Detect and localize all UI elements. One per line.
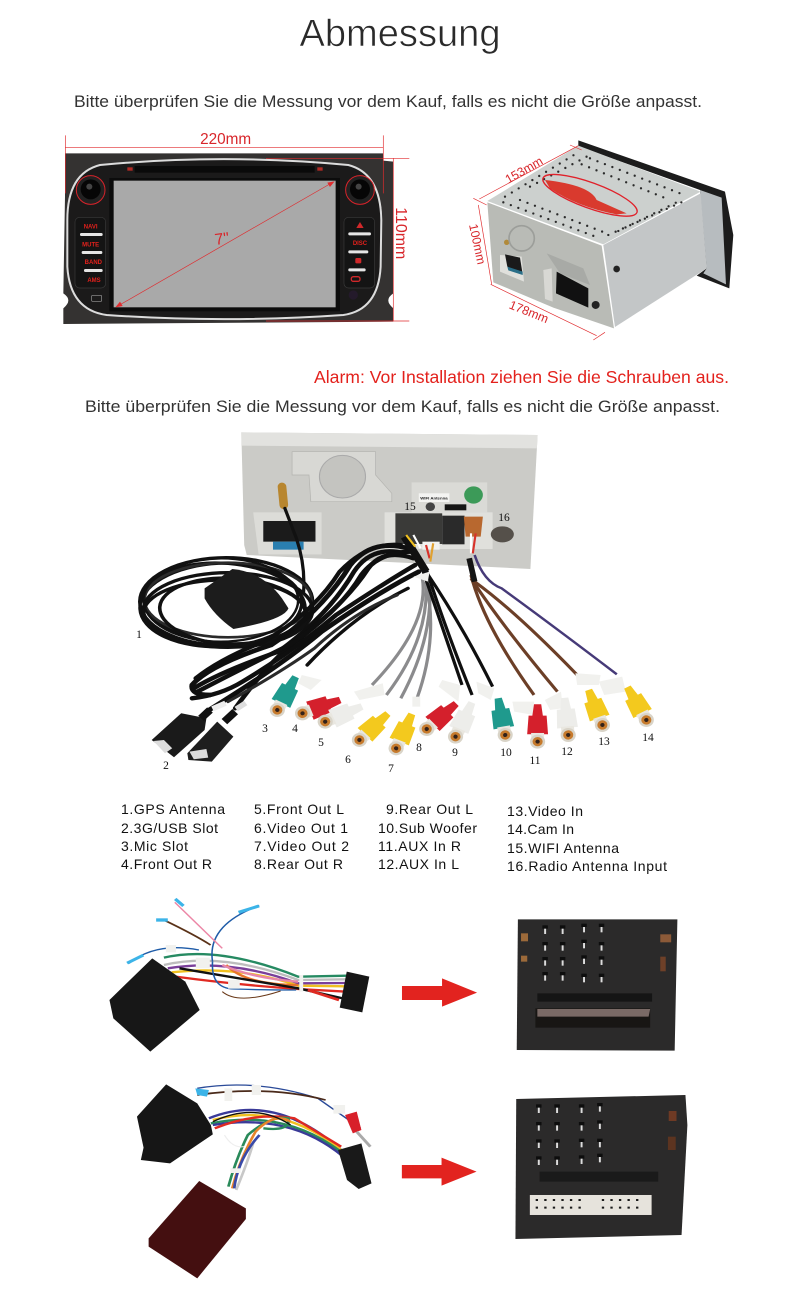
left button panel: BAND [85, 260, 103, 266]
rear face [487, 202, 614, 328]
connector legend list: 12.AUX In L [378, 856, 459, 872]
left button panel: NAVI [84, 224, 98, 230]
panel: rear connections with cables [138, 432, 659, 762]
cable: grey audio group [372, 578, 431, 698]
callout numbers on connectors: 13 [598, 736, 610, 748]
plug: large connector [137, 1084, 213, 1163]
cable: black audio group [419, 558, 493, 695]
connector legend list: 14.Cam In [507, 821, 574, 837]
callout numbers on connectors [136, 501, 654, 775]
dimension: 178mm: 178mm [507, 298, 551, 326]
icon: USB sockets [152, 701, 247, 762]
connectors: RCA plugs [265, 672, 659, 759]
dimension: 153mm [473, 145, 582, 205]
wire labels [224, 1085, 345, 1173]
callout numbers on connectors: 5 [318, 737, 324, 749]
callout numbers on connectors: 11 [529, 755, 541, 767]
plug: small connector [338, 1143, 372, 1189]
text: measurement note repeat: Bitte überprüfen Sie die Messung vor dem Kauf, falls es nicht die Größe anpasst. [85, 398, 720, 416]
dimension: 178mm [491, 284, 605, 340]
connector legend list: 11.AUX In R [378, 838, 461, 854]
icon: right knob [346, 176, 374, 204]
dimension: 7 inch diagonal [115, 181, 335, 307]
dimension: 153mm: 153mm [503, 154, 545, 187]
left button panel: MUTE [82, 243, 99, 249]
cable: GPS antenna with coil [138, 487, 313, 651]
callout numbers on connectors: 10 [500, 747, 512, 759]
dimension: 100mm: 100mm [466, 223, 488, 266]
screen [114, 181, 336, 307]
connector legend list: 16.Radio Antenna Input [507, 858, 667, 874]
left button panel: AMS [87, 278, 101, 284]
panel: wiring harness 2 with CAN box [137, 1084, 687, 1278]
panel: front view of head unit with dimensions [63, 131, 409, 324]
connector legend list: 15.WIFI Antenna [507, 840, 619, 856]
connector legend list: 3.Mic Slot [121, 838, 188, 854]
unit back plate [241, 432, 538, 569]
connector legend list: 2.3G/USB Slot [121, 820, 218, 836]
black front frame [578, 140, 733, 288]
connector face [517, 919, 677, 1051]
wire labels [166, 945, 303, 992]
callout numbers on connectors: 4 [292, 723, 298, 735]
callout numbers on connectors: 3 [262, 723, 268, 735]
callout numbers on connectors: 2 [163, 760, 169, 772]
connector legend list: 13.Video In [507, 803, 583, 819]
dimension: 7 inch diagonal: 7" [214, 230, 230, 249]
callout numbers on connectors: 7 [388, 763, 394, 775]
wire tips [126, 898, 260, 964]
cable: brown audio group [469, 558, 577, 695]
connector legend list: 8.Rear Out R [254, 856, 343, 872]
wire bundle [129, 902, 347, 1000]
callout numbers on connectors: 12 [561, 746, 573, 758]
right button panel: DISC [353, 241, 368, 247]
plug: small connector [340, 972, 369, 1012]
callout numbers on connectors: 15 [404, 501, 416, 513]
alarm warning text: Alarm: Vor Installation ziehen Sie die Schrauben aus. [314, 367, 729, 387]
icon: left knob [76, 176, 105, 204]
cable: purple [475, 555, 617, 674]
dimension: 110mm [266, 158, 409, 321]
left button panel [75, 217, 106, 288]
dimension: 220mm: 220mm [200, 131, 251, 148]
dimension: 110mm: 110mm [392, 207, 409, 259]
callout numbers on connectors: 6 [345, 754, 351, 766]
connector legend list: 7.Video Out 2 [254, 838, 349, 854]
cable: USB and mic coil [192, 545, 419, 712]
tips and pink wire [195, 1088, 209, 1097]
callout numbers on connectors: 8 [416, 742, 422, 754]
panel: rear perspective view with dimensions [466, 140, 733, 340]
connector face [515, 1095, 687, 1239]
callout numbers on connectors: 14 [642, 732, 654, 744]
connector legend list: 1.GPS Antenna [121, 801, 225, 817]
right button panel [344, 217, 375, 288]
red RCA style connector [345, 1112, 370, 1147]
right face [603, 193, 707, 327]
callout numbers on connectors: 1 [136, 629, 142, 641]
red highlighted strap [539, 166, 641, 224]
top face [487, 146, 701, 244]
text: measurement note: Bitte überprüfen Sie die Messung vor dem Kauf, falls es nicht die Größe anpasst. [74, 93, 702, 111]
title: Abmessung [300, 13, 500, 55]
connector legend list: 6.Video Out 1 [254, 820, 348, 836]
icon: GPS puck [205, 569, 288, 629]
connector legend list: 4.Front Out R [121, 856, 212, 872]
dimension: 100mm [466, 205, 492, 284]
connector legend list: 9.Rear Out L [386, 801, 473, 817]
CAN box [149, 1181, 246, 1278]
dimension: 220mm [65, 131, 383, 193]
plug: large connector [109, 958, 200, 1052]
arrow [402, 1158, 477, 1186]
cable labels [298, 572, 626, 715]
loom of coloured wires [404, 533, 476, 572]
connector legend list: 10.Sub Woofer [378, 820, 477, 836]
arrow [402, 978, 477, 1007]
panel: wiring harness 1 [109, 898, 677, 1052]
wire bundle [197, 1085, 361, 1190]
callout numbers on connectors: 16 [498, 512, 510, 524]
connector legend list [121, 801, 667, 874]
unit back plate: WIFI Antenna [420, 495, 448, 500]
callout numbers on connectors: 9 [452, 747, 458, 759]
connector legend list: 5.Front Out L [254, 801, 344, 817]
